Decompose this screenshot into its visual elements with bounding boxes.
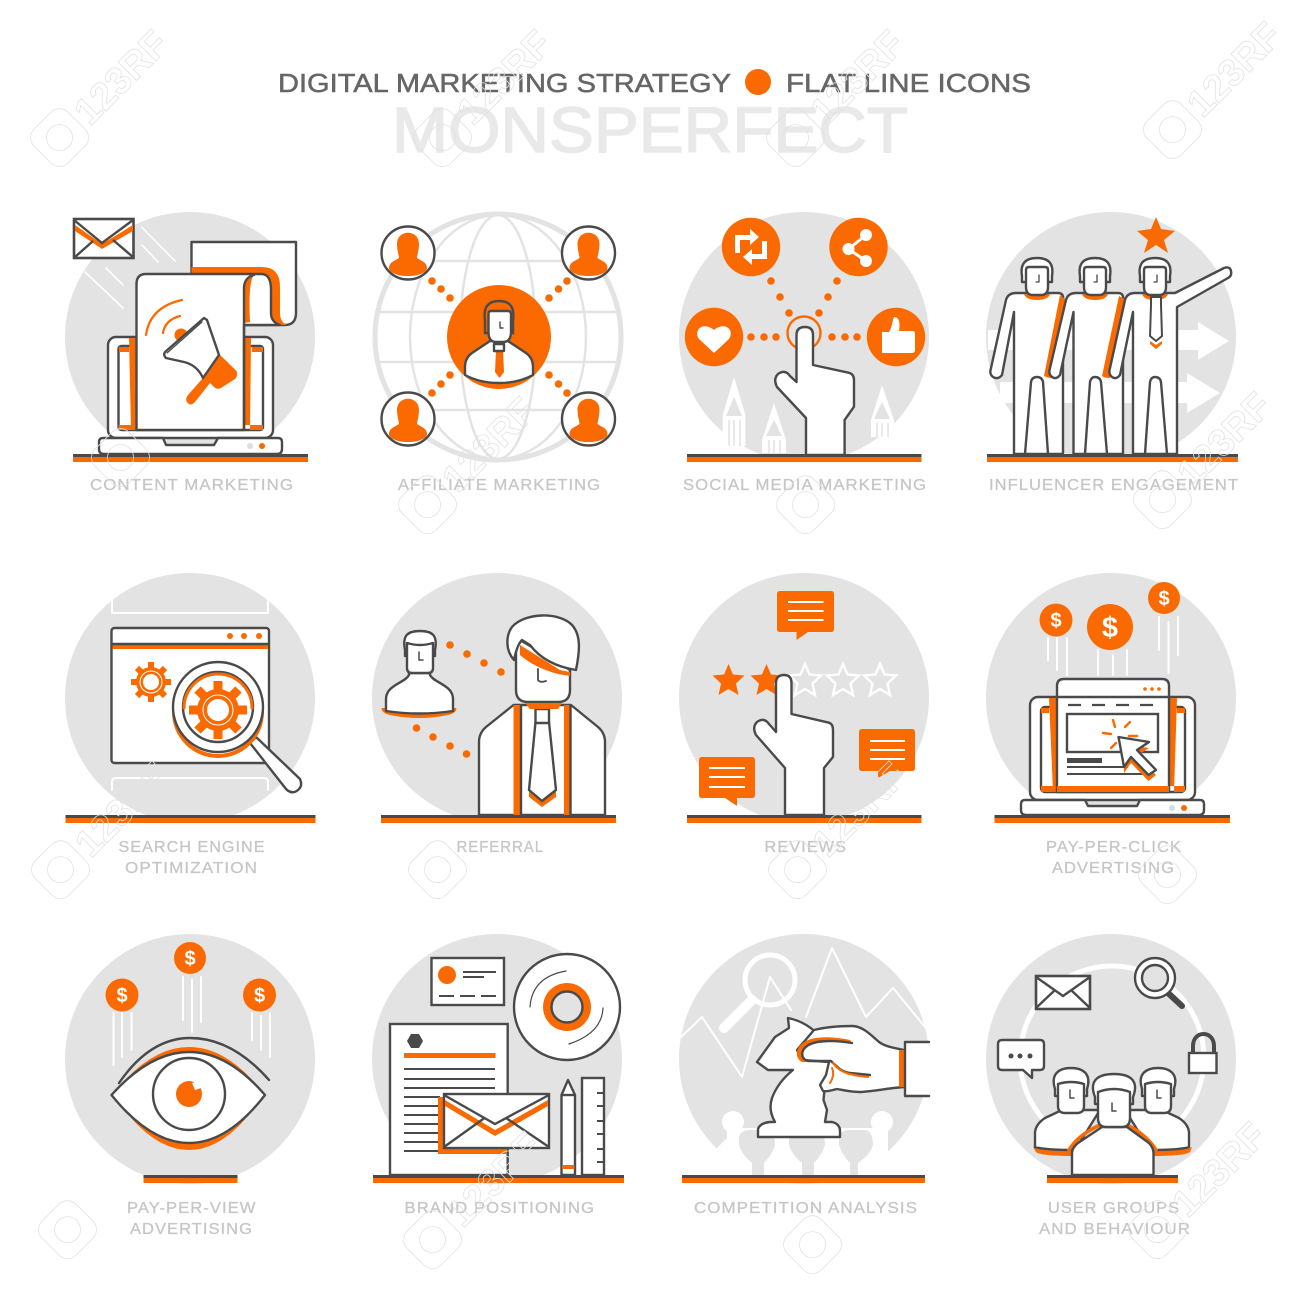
icon: magnifier with gear <box>172 662 301 792</box>
dollar coins: $ <box>254 985 265 1007</box>
label: REVIEWS <box>764 839 847 856</box>
panel: competition analysis <box>679 934 929 1217</box>
bg pawns <box>715 1111 893 1176</box>
background circle <box>372 934 622 1184</box>
dollar coins <box>106 942 276 1012</box>
panel: pay-per-click advertising <box>986 573 1236 877</box>
coin streaks <box>114 977 270 1065</box>
icon: disc <box>514 954 620 1060</box>
user group <box>1033 1068 1192 1175</box>
side users <box>1033 1068 1192 1156</box>
icon: envelope <box>74 219 134 258</box>
dollar coins: $ <box>116 985 128 1007</box>
icon: chat bubble <box>998 1040 1044 1078</box>
label: COMPETITION ANALYSIS <box>694 1200 918 1217</box>
man center <box>1049 258 1126 454</box>
stock photo watermarks: 123RF <box>68 755 178 865</box>
label: PAY-PER-CLICK <box>1046 839 1182 856</box>
background circle <box>679 573 929 823</box>
stock photo watermarks: 123RF <box>1180 15 1290 125</box>
baseline <box>687 454 922 462</box>
label <box>1039 1200 1191 1238</box>
background circle <box>65 573 315 823</box>
icon: pointing hand <box>775 327 854 455</box>
globe <box>375 214 621 460</box>
stock photo watermarks: 123RF <box>803 23 913 133</box>
panel: pay-per-view advertising <box>65 934 315 1238</box>
icon: envelope <box>1036 976 1090 1009</box>
orange title dot <box>745 69 771 95</box>
icon: megaphone <box>146 300 237 404</box>
background circle <box>372 573 622 823</box>
dollar coins <box>1040 582 1180 650</box>
dollar coins: $ <box>1050 610 1062 632</box>
label: AND BEHAVIOUR <box>1039 1221 1191 1238</box>
icon: small gear <box>131 662 171 702</box>
big person <box>479 615 605 815</box>
baseline <box>687 815 922 823</box>
title right: FLAT LINE ICONS <box>786 68 1031 98</box>
baseline <box>373 1175 624 1183</box>
label: OPTIMIZATION <box>125 860 258 877</box>
background circle <box>65 212 315 462</box>
label: BRAND POSITIONING <box>404 1200 595 1217</box>
panel: reviews <box>679 573 929 856</box>
back paper <box>192 242 296 325</box>
baseline <box>994 815 1230 823</box>
baseline <box>66 815 316 823</box>
label: ADVERTISING <box>130 1221 253 1238</box>
panel: user groups and behaviour <box>986 934 1236 1238</box>
icon: laptop <box>1021 697 1204 815</box>
stock photo watermarks: 123RF <box>450 23 560 133</box>
baseline <box>987 454 1238 462</box>
icon: share <box>829 218 888 276</box>
icon: laptop <box>99 337 282 454</box>
rating stars <box>712 664 896 695</box>
title left: DIGITAL MARKETING STRATEGY <box>278 68 731 98</box>
baseline <box>1047 1175 1178 1183</box>
label <box>127 1200 256 1238</box>
icon: cursor with sparks <box>1103 720 1156 781</box>
document <box>390 1024 508 1175</box>
baseline <box>144 1175 238 1183</box>
label: SEARCH ENGINE <box>118 839 266 856</box>
label: PAY-PER-VIEW <box>127 1200 256 1217</box>
label: INFLUENCER ENGAGEMENT <box>989 477 1239 494</box>
stock photo watermarks: 123RF <box>440 1125 550 1235</box>
speed lines <box>85 227 175 308</box>
icon: ruler <box>582 1078 604 1175</box>
man right pointing <box>1109 258 1231 454</box>
background circle <box>986 573 1236 823</box>
front page scroll <box>136 274 280 430</box>
bg pencils <box>723 377 894 453</box>
dollar coins: $ <box>1102 612 1118 644</box>
gray pawn silhouettes <box>739 1130 873 1175</box>
panel: affiliate marketing <box>375 214 621 460</box>
bg arrows <box>988 322 1229 413</box>
label <box>118 839 266 877</box>
background circle <box>986 212 1236 462</box>
bg magnifier <box>724 955 795 1028</box>
connector dots <box>747 277 861 341</box>
icon: heart <box>685 308 743 366</box>
background circle <box>679 934 929 1184</box>
icon: pencil <box>562 1080 575 1175</box>
men group <box>990 258 1231 454</box>
speech bubbles <box>699 591 915 806</box>
browser window <box>112 628 269 763</box>
small person bust <box>382 631 456 718</box>
icon: retweet <box>722 218 780 276</box>
header <box>278 68 1031 166</box>
coin streaks <box>1048 617 1178 675</box>
panel: brand positioning <box>372 934 624 1217</box>
label <box>1046 839 1182 877</box>
central person <box>447 285 551 389</box>
baseline <box>381 815 616 823</box>
bg window strips <box>112 600 268 790</box>
label: CONTENT MARKETING <box>90 477 294 494</box>
background circle <box>679 212 929 462</box>
panel: influencer engagement <box>986 212 1239 494</box>
bg chart line <box>681 948 925 1077</box>
icon: thumbs up <box>867 308 925 366</box>
dotted connectors <box>413 641 505 758</box>
label: USER GROUPS <box>1048 1200 1180 1217</box>
connector dots <box>428 277 571 397</box>
label: REFERRAL <box>456 839 544 856</box>
touch ring <box>788 316 820 350</box>
background circle <box>65 934 315 1184</box>
icon: star <box>1137 217 1175 253</box>
panel: referral <box>372 573 622 856</box>
panel: search engine optimization <box>65 573 316 877</box>
icon: hand holding knight <box>797 1026 929 1096</box>
dollar coins: $ <box>1158 588 1170 610</box>
stock photo watermarks: 123RF <box>1165 1115 1275 1225</box>
dollar coins: $ <box>184 948 196 970</box>
panel: content marketing <box>65 212 315 494</box>
icon: pointing hand <box>754 675 833 815</box>
stock photo watermarks: 123RF <box>1170 385 1280 495</box>
business card <box>432 958 504 1005</box>
label: ADVERTISING <box>1052 860 1175 877</box>
baseline <box>73 454 308 462</box>
label: SOCIAL MEDIA MARKETING <box>683 477 927 494</box>
baseline <box>682 1175 925 1183</box>
man left <box>990 258 1066 454</box>
icon: magnifier <box>1135 958 1182 1006</box>
icon: eye <box>112 1038 269 1150</box>
panel: social media marketing <box>679 212 929 494</box>
front user <box>1069 1074 1156 1175</box>
brand watermark: MONSPERFECT <box>392 94 908 166</box>
label: affiliate marketing: AFFILIATE MARKETING <box>398 477 601 494</box>
icon: padlock <box>1189 1034 1216 1073</box>
background circle <box>986 934 1236 1184</box>
web page <box>1057 679 1169 792</box>
stock photo watermarks: 123RF <box>67 23 177 133</box>
user avatars <box>382 226 615 446</box>
icon: envelope <box>438 1094 549 1154</box>
stock photo watermarks: 123RF <box>435 390 545 500</box>
icon: knight chess piece <box>757 1018 840 1137</box>
white orbit ring <box>1020 966 1204 1150</box>
stock photo watermarks: 123RF <box>805 755 915 865</box>
